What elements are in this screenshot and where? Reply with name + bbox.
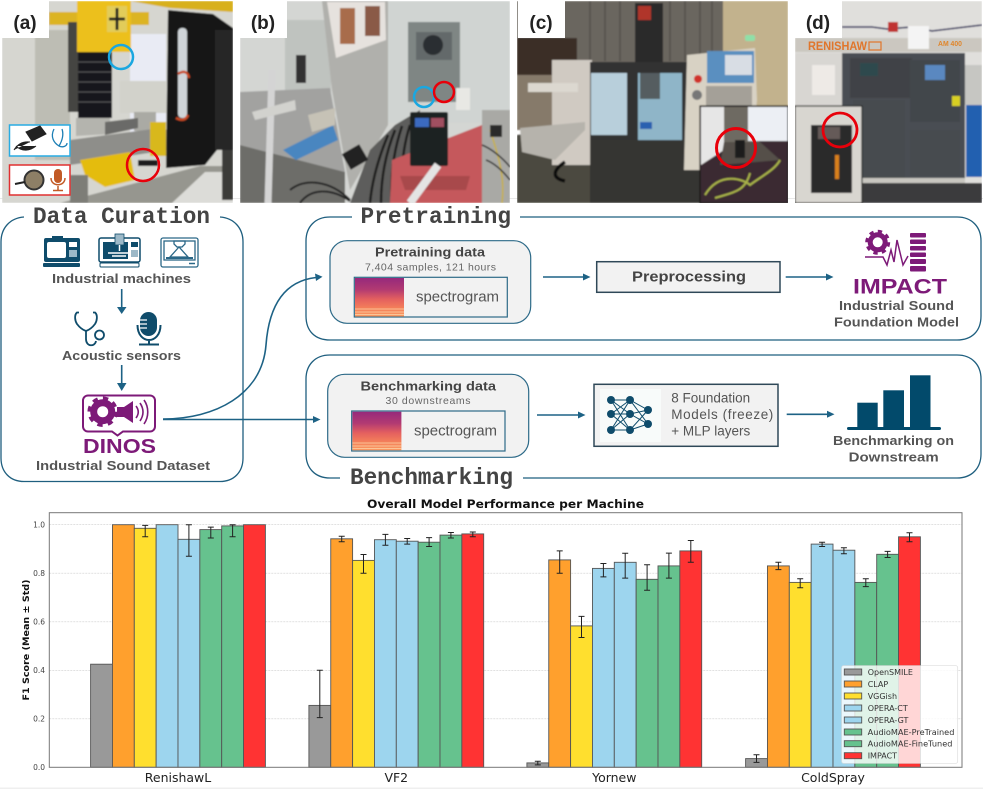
photo panel (b): cold spray machine [240,1,510,203]
label (b) [240,1,287,38]
icon: microphone [138,312,160,344]
photo panel (d): Renishaw AM 400 [795,1,982,203]
y-axis ticks: 0.6 [33,618,45,627]
arrow: data to preprocessing [543,274,590,280]
sensor location circle red [127,149,159,181]
y-axis ticks: 0.4 [33,666,45,675]
arrow: data to models [537,412,586,418]
bars: ColdSpray [746,533,920,767]
label (a): (a) [13,13,37,34]
legend: OpenSMILE [868,668,913,677]
box: Preprocessing: Preprocessing [632,270,746,286]
legend: AudioMAE-FineTuned [868,740,952,748]
icon: IMPACT logo [865,231,926,272]
legend [842,666,958,763]
sensor location circle red [823,113,857,147]
text: model description: 8 Foundation [671,390,750,405]
text: model description [671,390,773,439]
text: Industrial Sound Dataset: Industrial Sound Dataset [36,458,211,473]
icon: DINOS logo [83,396,155,436]
x-axis labels [145,770,866,785]
heading: Pretraining: Pretraining [360,204,511,230]
arrow: dataset to benchmarking [163,416,320,423]
sensor location circle red [434,82,454,102]
bars: Yornew [527,540,702,767]
y-axis ticks: 0.2 [33,715,45,724]
legend: OPERA-CT [868,704,908,713]
legend: CLAP [868,680,888,689]
arrow: machines to sensors [117,289,126,314]
chart title: Overall Model Performance per Machine [367,497,644,511]
label (d) [795,1,842,38]
panel: Data Curation [1,204,243,482]
icon: neural network [600,389,661,442]
label (c): (c) [529,13,553,34]
text: Industrial Sound Foundation Model: Industrial Sound [839,298,954,313]
text: Benchmarking on Downstream: Benchmarking on [833,433,954,448]
x-axis labels: ColdSpray [801,770,866,785]
text: Benchmarking data title: Benchmarking data [360,379,497,394]
text: IMPACT: IMPACT [853,274,947,298]
sensor location circle red [716,128,756,168]
heading: Data Curation: Data Curation [33,204,210,230]
spectrogram [354,277,507,317]
y-axis ticks: 0.8 [33,569,45,578]
machine brand text: RENISHAW [808,41,867,53]
legend: AudioMAE-PreTrained [868,728,954,737]
arrow: dataset to pretraining [163,274,322,419]
legend: IMPACT [868,752,897,760]
arrow: preprocessing to model [786,274,834,280]
heading: Benchmarking: Benchmarking [350,465,513,491]
panel: Pretraining [306,204,981,340]
text: Industrial machines: Industrial machines [52,271,191,286]
spectrogram: spectrogram [416,289,499,306]
box: Pretraining data [330,241,531,323]
text: Benchmarking on Downstream: Downstream [849,450,939,465]
text: Industrial Sound Foundation Model [834,298,959,330]
y-axis ticks: 1.0 [33,520,45,530]
text: DINOS: DINOS [83,436,156,458]
text: model description: Models (freeze) [671,407,773,422]
sensor callout: contact microphone and stethoscope [10,125,70,156]
label (b): (b) [251,13,275,34]
text: model description: + MLP layers [671,424,750,439]
sensor location circle blue [414,87,434,107]
arrow: models to benchmark [787,411,834,418]
x-axis labels: RenishawL [145,770,211,785]
icon: stethoscope [75,312,104,345]
arrow: sensors to dataset [117,365,126,391]
bar chart: Overall Model Performance per Machine [22,497,962,785]
box: Benchmarking data [328,374,529,457]
box: 8 foundation models [594,384,778,446]
panel: Benchmarking [306,355,981,491]
legend: OPERA-GT [868,716,909,725]
legend: VGGish [868,692,897,701]
icon: 3D printer [161,238,198,267]
y-axis ticks: 0.0 [33,763,45,772]
x-axis labels: VF2 [384,770,408,785]
box: Preprocessing [597,262,780,292]
text: Acoustic sensors: Acoustic sensors [62,348,181,363]
bars: RenishawL [91,525,265,767]
icon: bar chart [847,375,941,430]
icon: CNC lathe [43,236,80,267]
spectrogram: spectrogram [414,423,497,440]
label (d): (d) [806,13,830,34]
text: Pretraining data title: Pretraining data [375,245,486,260]
sensor location circle blue [109,45,133,69]
sensor callout: microphone [10,165,70,195]
photo panel (c): VF2 CNC machine [517,1,788,203]
spectrogram [352,411,505,451]
label (c) [518,1,565,38]
machine model text: AM 400 [938,39,962,48]
bars: VF2 [309,532,484,767]
y-axis ticks [33,520,45,772]
text: samples and hours: 7,404 samples, 121 hours [365,261,496,273]
y-axis label: F1 Score (Mean ± Std) [22,580,32,700]
machine brand logo [869,42,881,50]
label (a) [2,1,49,38]
text: Industrial Sound Foundation Model: Foundation Model [834,315,959,330]
x-axis labels: Yornew [591,770,636,785]
photo panel (a): milling machine with sensors [2,1,233,203]
text: Benchmarking on Downstream [833,433,954,465]
icon: milling machine [99,234,140,267]
text: downstreams count: 30 downstreams [386,395,470,407]
